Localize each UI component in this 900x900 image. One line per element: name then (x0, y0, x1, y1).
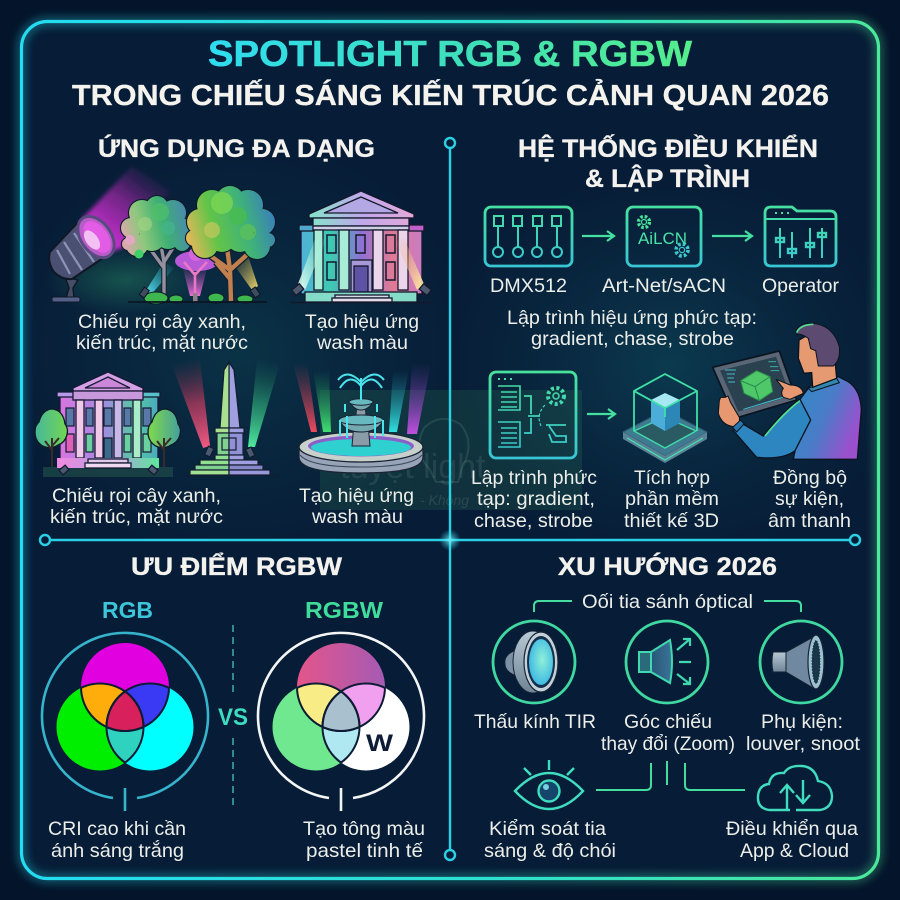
trees beside building (35, 409, 180, 467)
captions: optical items (474, 711, 861, 755)
caption: CRI: CRI cao khi cần (48, 818, 186, 840)
labels: protocols: Art-Net/sACN (602, 275, 726, 297)
panel: ứng dụng đa dạng (35, 133, 432, 528)
caption: beam control: sáng & độ chói (484, 840, 616, 862)
label: RGB: RGB (102, 597, 153, 623)
watermark (320, 390, 582, 510)
heading: control system: & LẬP TRÌNH (585, 163, 750, 193)
icon: programming panel (490, 372, 576, 458)
caption: pastel: Tạo tông màu (303, 818, 425, 840)
caption: beam control (484, 818, 616, 862)
illustration: building wash (290, 191, 432, 302)
icon: zoom beam angle (626, 621, 708, 703)
illustration: classical building with trees (43, 372, 173, 477)
caption: app control (726, 818, 858, 862)
title: TRONG CHIẾU SÁNG KIẾN TRÚC CẢNH QUAN 2026 (72, 78, 829, 112)
caption: trees, architecture, water (76, 311, 248, 354)
caption: trees, architecture, water second (50, 485, 223, 528)
title: SPOTLIGHT RGB & RGBW (208, 33, 692, 74)
caption: wash effect: Tạo hiệu ứng (305, 311, 419, 333)
illustration: person with tablet (713, 323, 861, 459)
heading: RGBW advantages: ƯU ĐIỂM RGBW (131, 552, 342, 581)
watermark: tuyệt light (340, 448, 486, 486)
watermark: - Không (420, 492, 469, 508)
label: RGBW: RGBW (305, 597, 383, 623)
panel: hệ thống điều khiển (471, 133, 861, 532)
caption: wash effect second: Tạo hiệu ứng (299, 485, 414, 507)
arrow (712, 231, 752, 241)
caption: 3D integration: Tích hợp (634, 467, 710, 489)
caption: pastel: pastel tinh tế (306, 840, 423, 862)
icon: louver accessory (760, 621, 842, 703)
caption: CRI (48, 818, 186, 862)
bracket with optical label (534, 591, 801, 613)
caption: trees, architecture, water second: Chiếu rọi cây xanh, (52, 485, 221, 507)
labels: protocols (490, 275, 840, 297)
captions: optical items: Góc chiếu (624, 711, 712, 733)
caption: 3D integration (624, 467, 719, 532)
heading: control system (518, 133, 818, 193)
caption: sync (768, 467, 851, 532)
caption: app control: Điều khiển qua (726, 818, 858, 840)
caption: 3D integration: thiết kế 3D (624, 510, 719, 532)
caption: programming: chase, strobe (474, 510, 593, 532)
connector lines (596, 761, 745, 790)
caption: wash effect: wash màu (316, 332, 408, 354)
small uplights (139, 287, 260, 298)
caption: pastel (303, 818, 425, 862)
panel: xu hướng 2026 (474, 551, 861, 862)
text: effects programming: Lập trình hiệu ứng phức tạp: (507, 307, 757, 329)
icon: eye (515, 760, 583, 809)
tree left (121, 196, 193, 296)
illustration: obelisk with beams (170, 360, 281, 476)
title (72, 33, 829, 112)
bracket with optical label: Oối tia sánh óptical (582, 591, 753, 613)
section dividers with nodes (40, 138, 860, 860)
caption: programming: tạp: gradient, (477, 488, 595, 510)
bushes (144, 292, 253, 304)
caption: sync: âm thanh (768, 510, 851, 532)
caption: programming: Lập trình phức (471, 467, 597, 489)
VS label: VS (218, 704, 248, 731)
captions: optical items: thay đổi (Zoom) (601, 733, 735, 755)
heading: trends: XU HƯỚNG 2026 (558, 551, 777, 581)
caption: wash effect second: wash màu (311, 506, 403, 528)
icon: cloud (758, 766, 832, 811)
caption: programming (471, 467, 597, 532)
caption: wash effect second (299, 485, 414, 528)
text: effects programming: gradient, chase, strobe (531, 328, 734, 350)
caption: 3D integration: phần mềm (625, 488, 719, 510)
captions: optical items: louver, snoot (746, 733, 861, 755)
caption: trees, architecture, water: Chiếu rọi cây xanh, (78, 311, 246, 333)
panel: ưu điểm RGBW (42, 552, 425, 862)
chart: RGBW venn diagram (258, 633, 424, 811)
caption: sync: sự kiện, (775, 488, 844, 510)
captions: optical items: Phụ kiện: (761, 711, 843, 733)
chart: RGB venn diagram (42, 633, 208, 811)
caption: sync: Đồng bộ (773, 467, 847, 489)
icon: DMX512 (485, 207, 572, 266)
icon: Art-Net/sACN (627, 207, 701, 266)
caption: wash effect (305, 311, 419, 354)
caption: app control: App & Cloud (740, 840, 849, 862)
chart: RGBW venn diagram: W (366, 730, 393, 757)
heading: applications: ỨNG DỤNG ĐA DẠNG (98, 133, 375, 163)
arrow (582, 231, 614, 241)
text: effects programming (507, 307, 757, 350)
caption: trees, architecture, water: kiến trúc, mặt nước (76, 332, 248, 354)
illustration: spotlight and trees (45, 166, 275, 314)
heading: control system: HỆ THỐNG ĐIỀU KHIỂN (518, 133, 818, 163)
illustration: fountain with beams (293, 363, 431, 473)
labels: protocols: DMX512 (490, 275, 567, 297)
caption: CRI: ánh sáng trắng (51, 839, 184, 862)
captions: optical items: Thấu kính TIR (474, 711, 596, 733)
caption: beam control: Kiểm soát tia (489, 818, 606, 840)
labels: protocols: Operator (762, 275, 840, 297)
icon: Art-Net/sACN: AiLCN (638, 229, 687, 248)
tree right (186, 186, 275, 301)
icon: Operator (765, 207, 836, 266)
small purple tree (175, 247, 219, 302)
icon: TIR lens (493, 621, 575, 703)
caption: trees, architecture, water second: kiến trúc, mặt nước (50, 506, 223, 528)
icon: 3D cube on platform (623, 374, 707, 463)
spotlight fixture (49, 210, 122, 302)
arrow (587, 409, 615, 419)
